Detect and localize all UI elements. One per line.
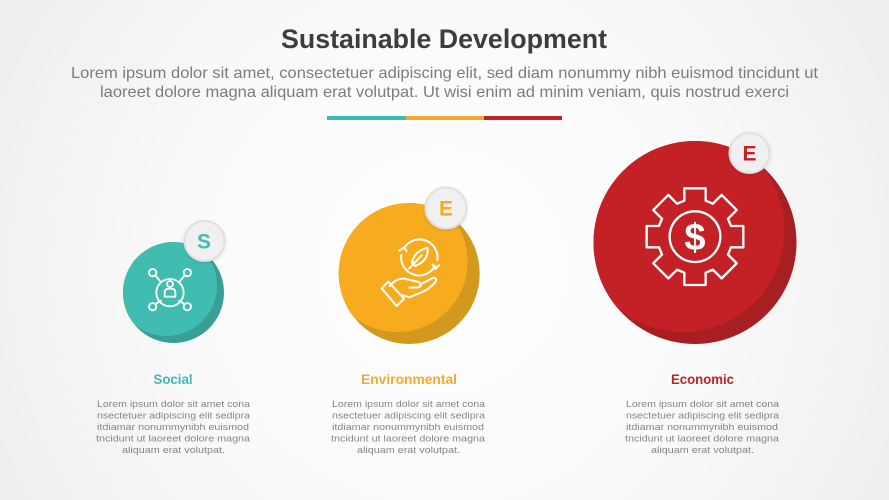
economic description: aliquam erat volutpat. — [651, 445, 754, 456]
environmental description: itdiamar nonummynibh euismod — [332, 422, 484, 433]
environmental description: Lorem ipsum dolor sit amet cona — [332, 399, 486, 410]
economic circle — [594, 141, 796, 344]
environmental description — [331, 399, 486, 456]
icon: gear with dollar: $ — [684, 217, 706, 259]
icon: gear with dollar — [647, 188, 743, 285]
subtitle text block: Lorem ipsum dolor sit amet, consectetuer adipiscing elit, sed diam nonummy nibh euismod tincidunt ut — [71, 65, 819, 82]
social description — [96, 399, 251, 456]
badge: S — [184, 221, 224, 261]
social description: Lorem ipsum dolor sit amet cona — [97, 399, 251, 410]
social description: tncidunt ut laoreet dolore magna — [96, 434, 251, 444]
social description: nsectetuer adipiscing elit sedipra — [97, 410, 251, 422]
economic description: tncidunt ut laoreet dolore magna — [625, 434, 780, 444]
badge: E — [730, 133, 770, 173]
environmental description: nsectetuer adipiscing elit sedipra — [332, 410, 486, 422]
social description: aliquam erat volutpat. — [122, 445, 225, 456]
heading: Social: Social — [154, 371, 192, 387]
heading: Environmental: Environmental — [361, 371, 457, 387]
economic description: itdiamar nonummynibh euismod — [626, 422, 778, 433]
environmental description: aliquam erat volutpat. — [357, 445, 460, 456]
heading: Economic: Economic — [671, 371, 734, 387]
title: Sustainable Development — [281, 24, 607, 54]
icon: person network — [149, 269, 191, 310]
social description: itdiamar nonummynibh euismod — [97, 422, 249, 433]
subtitle text block — [71, 65, 819, 101]
icon: hand holding leaf — [382, 239, 439, 306]
economic description — [625, 399, 780, 456]
economic description: nsectetuer adipiscing elit sedipra — [626, 410, 780, 422]
panel: social — [96, 221, 251, 456]
tricolor divider bar — [327, 116, 562, 120]
badge: E: E — [742, 142, 757, 166]
environmental circle — [338, 203, 480, 344]
subtitle text block: laoreet dolore magna aliquam erat volutpat. Ut wisi enim ad minim veniam, quis nostrud exerci — [100, 84, 789, 101]
panel: economic — [582, 129, 796, 456]
badge: E — [426, 188, 466, 228]
economic description: Lorem ipsum dolor sit amet cona — [626, 399, 780, 410]
panel: environmental — [327, 188, 486, 456]
social circle — [123, 242, 224, 343]
badge: S: S — [197, 230, 211, 254]
environmental description: tncidunt ut laoreet dolore magna — [331, 434, 486, 444]
badge: E: E — [439, 198, 453, 220]
